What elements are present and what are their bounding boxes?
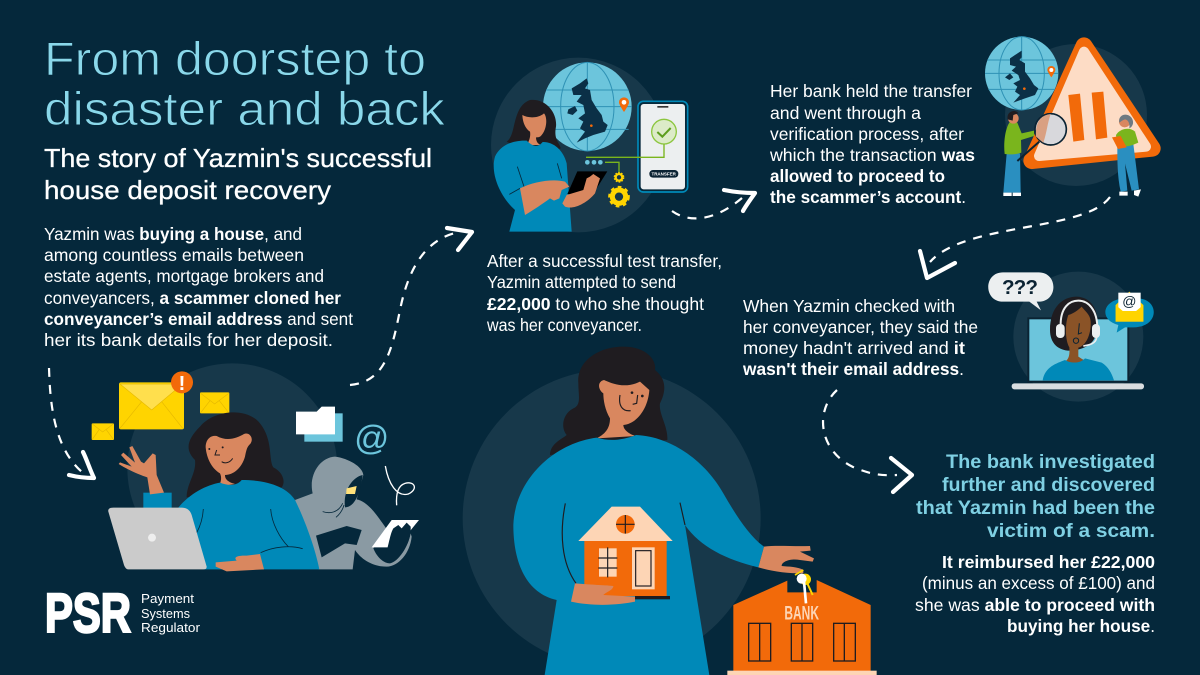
warning triangle with pause bars	[1032, 46, 1152, 161]
icon: bank	[727, 580, 877, 675]
phone with check mark	[638, 101, 688, 192]
hand holding house	[571, 583, 635, 605]
text block: bank verification: and went through a	[770, 103, 921, 123]
illustration: call handler on laptop	[988, 272, 1154, 402]
logo: PSR Payment Systems Regulator: Systems	[141, 607, 190, 621]
text block: test transfer: £22,000 to who she thought	[487, 294, 704, 314]
arrow: text to first illustration	[49, 368, 94, 478]
text block: buying a house: her its bank details for her deposit.	[44, 330, 333, 350]
logo: PSR Payment Systems Regulator: Payment	[141, 592, 195, 606]
text block: reimbursement: It reimbursed her £22,000	[942, 552, 1155, 572]
scammer	[295, 457, 419, 569]
title	[44, 32, 446, 135]
text block: test transfer: After a successful test transfer,	[487, 251, 722, 271]
text block: conveyancer check: money hadn't arrived and it	[743, 338, 965, 358]
text block: buying a house: estate agents, mortgage brokers and	[44, 266, 324, 286]
background circle	[463, 369, 761, 667]
icon: email bubble	[1105, 292, 1154, 333]
globe with UK map	[985, 37, 1058, 110]
illustration: warning sign with globe and investigators	[985, 37, 1152, 197]
call handler	[1043, 297, 1114, 380]
woman with laptop	[108, 412, 319, 571]
text block: buying a house: Yazmin was buying a house, and	[44, 224, 302, 244]
callout: bank investigated: that Yazmin had been the	[916, 497, 1155, 519]
text block: conveyancer check: When Yazmin checked with	[743, 296, 955, 316]
logo: PSR Payment Systems Regulator: Regulator	[141, 621, 200, 635]
title: From doorstep to	[44, 32, 426, 85]
icon: bank: BANK	[784, 603, 819, 624]
icon: small envelope left	[92, 423, 114, 440]
woman using phone	[494, 100, 607, 232]
scribble	[385, 466, 414, 505]
icon: small envelope right	[200, 392, 229, 413]
text block: buying a house: conveyancers, a scammer cloned her	[44, 288, 341, 308]
arrow: conveyancer to outcome	[823, 390, 912, 492]
text block: test transfer	[486, 251, 722, 335]
arrow: bank to conveyancer	[920, 197, 1110, 278]
subtitle	[44, 143, 432, 205]
text block: test transfer: was her conveyancer.	[486, 315, 642, 335]
icon: house	[578, 507, 673, 599]
speech bubble with question marks	[988, 272, 1053, 310]
illustration: Yazmin receives emails and the scammer	[92, 363, 419, 573]
text block: bank verification: the scammer’s account.	[770, 187, 966, 207]
text block: conveyancer check: her conveyancer, they said the	[743, 317, 978, 337]
text block: conveyancer check: wasn't their email address.	[742, 359, 964, 379]
text block: bank verification: which the transaction was	[769, 145, 975, 165]
icon: email bubble: @	[1122, 293, 1136, 309]
illustration: test transfer with globe and phone	[491, 58, 688, 232]
text block: bank verification: Her bank held the transfer	[770, 81, 972, 101]
callout: bank investigated: victim of a scam.	[987, 520, 1155, 542]
icon: folder	[296, 407, 343, 442]
illustration: Yazmin with house and bank	[463, 347, 877, 675]
text block: buying a house	[44, 224, 353, 350]
background circle	[1005, 44, 1147, 186]
callout: bank investigated	[916, 451, 1155, 542]
laptop screen	[1012, 318, 1144, 389]
text block: buying a house: conveyancer’s email address and sent	[44, 309, 353, 329]
icon: location pin	[1047, 66, 1055, 77]
text block: buying a house: among countless emails between	[44, 245, 304, 265]
logo: PSR Payment Systems Regulator: PSR	[45, 582, 131, 644]
globe with UK map	[543, 62, 632, 151]
speech bubble with question marks: ???	[1002, 276, 1038, 299]
callout: bank investigated: further and discovered	[942, 474, 1155, 496]
subtitle: The story of Yazmin's successful	[44, 143, 432, 173]
text block: reimbursement: she was able to proceed with	[915, 595, 1155, 615]
callout: bank investigated: The bank investigated	[946, 451, 1155, 473]
arrow: phone to bank	[672, 190, 755, 218]
icon: alert badge: !	[179, 372, 185, 395]
person with clipboard	[1112, 115, 1141, 197]
subtitle: house deposit recovery	[44, 175, 331, 205]
phone with check mark: TRANSFER	[651, 171, 677, 176]
text block: bank verification: allowed to proceed to	[770, 166, 945, 186]
text block: test transfer: Yazmin attempted to send	[487, 272, 676, 292]
text block: reimbursement	[915, 552, 1155, 636]
background circle	[491, 58, 666, 232]
background circle	[1013, 272, 1143, 402]
icon: alert badge	[171, 371, 193, 395]
text block: conveyancer check	[742, 296, 978, 379]
text block: reimbursement: (minus an excess of £100) and	[922, 573, 1155, 593]
person with magnifier	[1003, 111, 1066, 196]
text block: reimbursement: buying her house.	[1007, 616, 1155, 636]
title: disaster and back	[44, 82, 446, 135]
icon: gears	[609, 173, 629, 206]
text block: bank verification	[769, 81, 975, 207]
connector and dots	[585, 144, 664, 172]
icon: at sign: @	[354, 419, 389, 457]
background circle	[128, 364, 336, 508]
icon: large envelope	[119, 382, 184, 429]
icon: keys	[795, 570, 813, 603]
woman	[513, 347, 814, 675]
arrow: first illustration to test transfer	[350, 228, 472, 385]
text block: bank verification: verification process, after	[770, 124, 964, 144]
